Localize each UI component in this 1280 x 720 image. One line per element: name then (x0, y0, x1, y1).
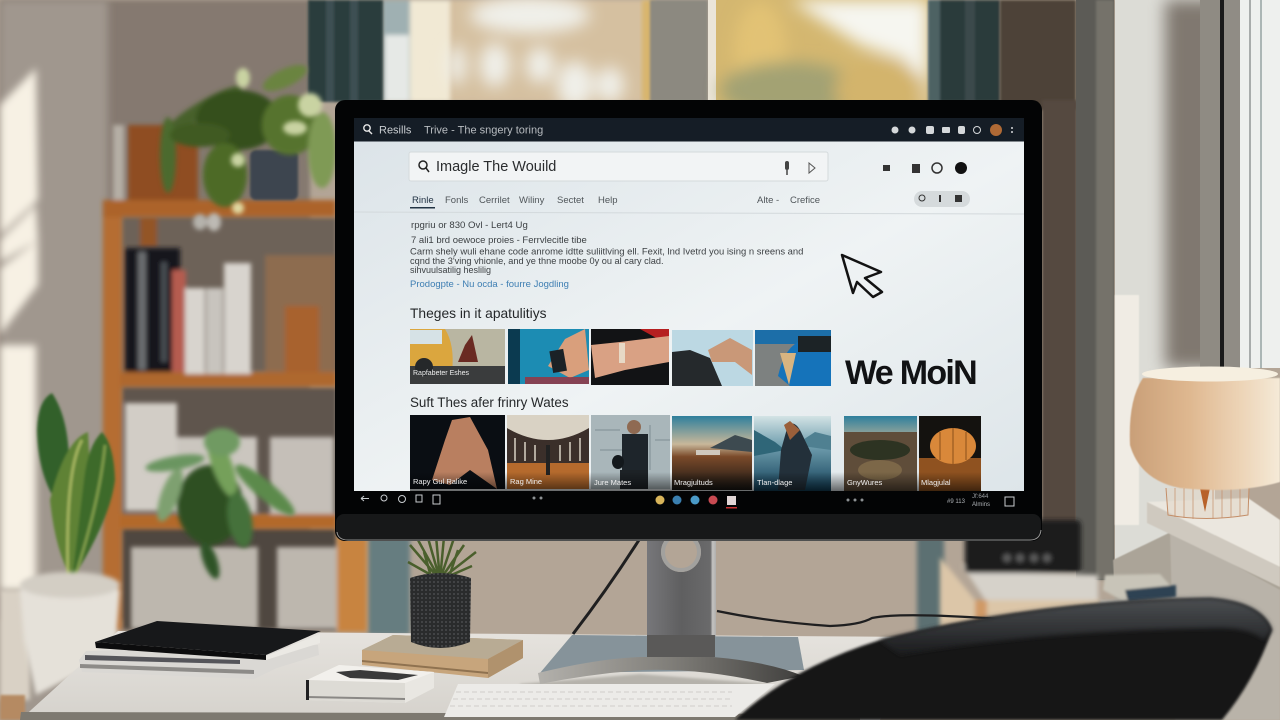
thumbnail captions (410, 370, 981, 491)
wordmark: We MoiN (845, 354, 976, 392)
thumbnails row two (410, 370, 981, 491)
bookshelf (103, 125, 367, 632)
taskbar (354, 491, 1024, 514)
thumbnail captions: Tlan-dlage (757, 478, 792, 487)
right wall and window (1042, 0, 1280, 720)
taskbar: #9 113 (947, 499, 966, 505)
items on top shelf (128, 125, 198, 200)
toolbar icons (883, 162, 967, 174)
taskbar: Jf:644 (972, 494, 989, 500)
browser top bar: Trive - The sngery toring (424, 124, 543, 136)
floor plant with pot (20, 393, 120, 695)
monitor stand (520, 530, 804, 688)
office chair (735, 598, 1272, 720)
search result text (410, 220, 803, 290)
cables (573, 540, 1040, 634)
heading: second gallery: Suft Thes afer frinry Wates (410, 395, 569, 410)
plant hanging mid shelf (144, 428, 300, 581)
keyboard (444, 684, 775, 717)
navigation tabs: Alte - (757, 195, 779, 206)
navigation tabs: Fonls (445, 195, 468, 206)
notebooks stack (79, 621, 321, 679)
browser top bar (354, 118, 1024, 142)
thumbnail captions: Rapfabeter Eshes (413, 370, 470, 377)
heading: first gallery: Theges in it apatulitiys (410, 306, 547, 321)
search result text: cqnd the 3'ving vhionle, and ye thne moobe 0y ou al cary clad. (410, 256, 664, 266)
desk plant in black pot (408, 536, 476, 648)
search box (409, 152, 828, 181)
stacked books on desk (306, 635, 523, 703)
desk (20, 631, 920, 720)
search result text: 7 ali1 brd oewoce proies - Ferrvlecitle tibe (411, 235, 587, 246)
thumbnail captions: GnyWures (847, 478, 883, 487)
mouse cursor (842, 255, 882, 297)
plant on shelf (160, 60, 336, 231)
taskbar: Almins (972, 502, 990, 508)
cabinet and printer (940, 520, 1176, 632)
navigation tabs: Help (598, 195, 618, 206)
screen (354, 118, 1024, 491)
thumbnail captions: Mragjultuds (674, 478, 713, 487)
books (125, 248, 180, 372)
window with trees, top centre (382, 0, 928, 120)
navigation tabs: Cerrilet (479, 195, 510, 206)
search box: Imagle The Wouild (436, 159, 556, 175)
search result text: sihvuulsatilig heslilig (410, 265, 491, 275)
search result text: Prodogpte - Nu ocda - fourre Jogdling (410, 279, 569, 290)
navigation tabs: Rinle (412, 195, 434, 206)
search result text: Carm shely wuli ehane code anrome idtte suliitlving ell. Fexit, lnd Ivetrd you ising n sreens and (410, 246, 803, 258)
monitor bezel (335, 100, 1042, 541)
navigation tabs: Sectet (557, 195, 584, 206)
thumbnail captions: Rag Mine (510, 477, 542, 486)
navigation tabs (410, 191, 970, 208)
thumbnails row one (410, 329, 831, 386)
sunlight patch on left wall (0, 68, 38, 590)
browser top bar: Resills (379, 124, 412, 136)
thumbnail captions: Jure Mates (594, 478, 631, 487)
small white book (307, 665, 434, 703)
search result text: rpgriu or 830 Ovl - Lert4 Ug (411, 220, 528, 231)
navigation tabs: Crefice (790, 195, 820, 206)
lamp (1130, 366, 1280, 519)
thumbnail captions: Rapy Gul Ralike (413, 477, 467, 486)
thumbnail captions: Mlagjulal (921, 478, 951, 487)
monitor (335, 100, 1042, 541)
navigation tabs: Wiliny (519, 195, 545, 206)
lamp base cage (1166, 488, 1249, 519)
curtains (308, 0, 1076, 635)
